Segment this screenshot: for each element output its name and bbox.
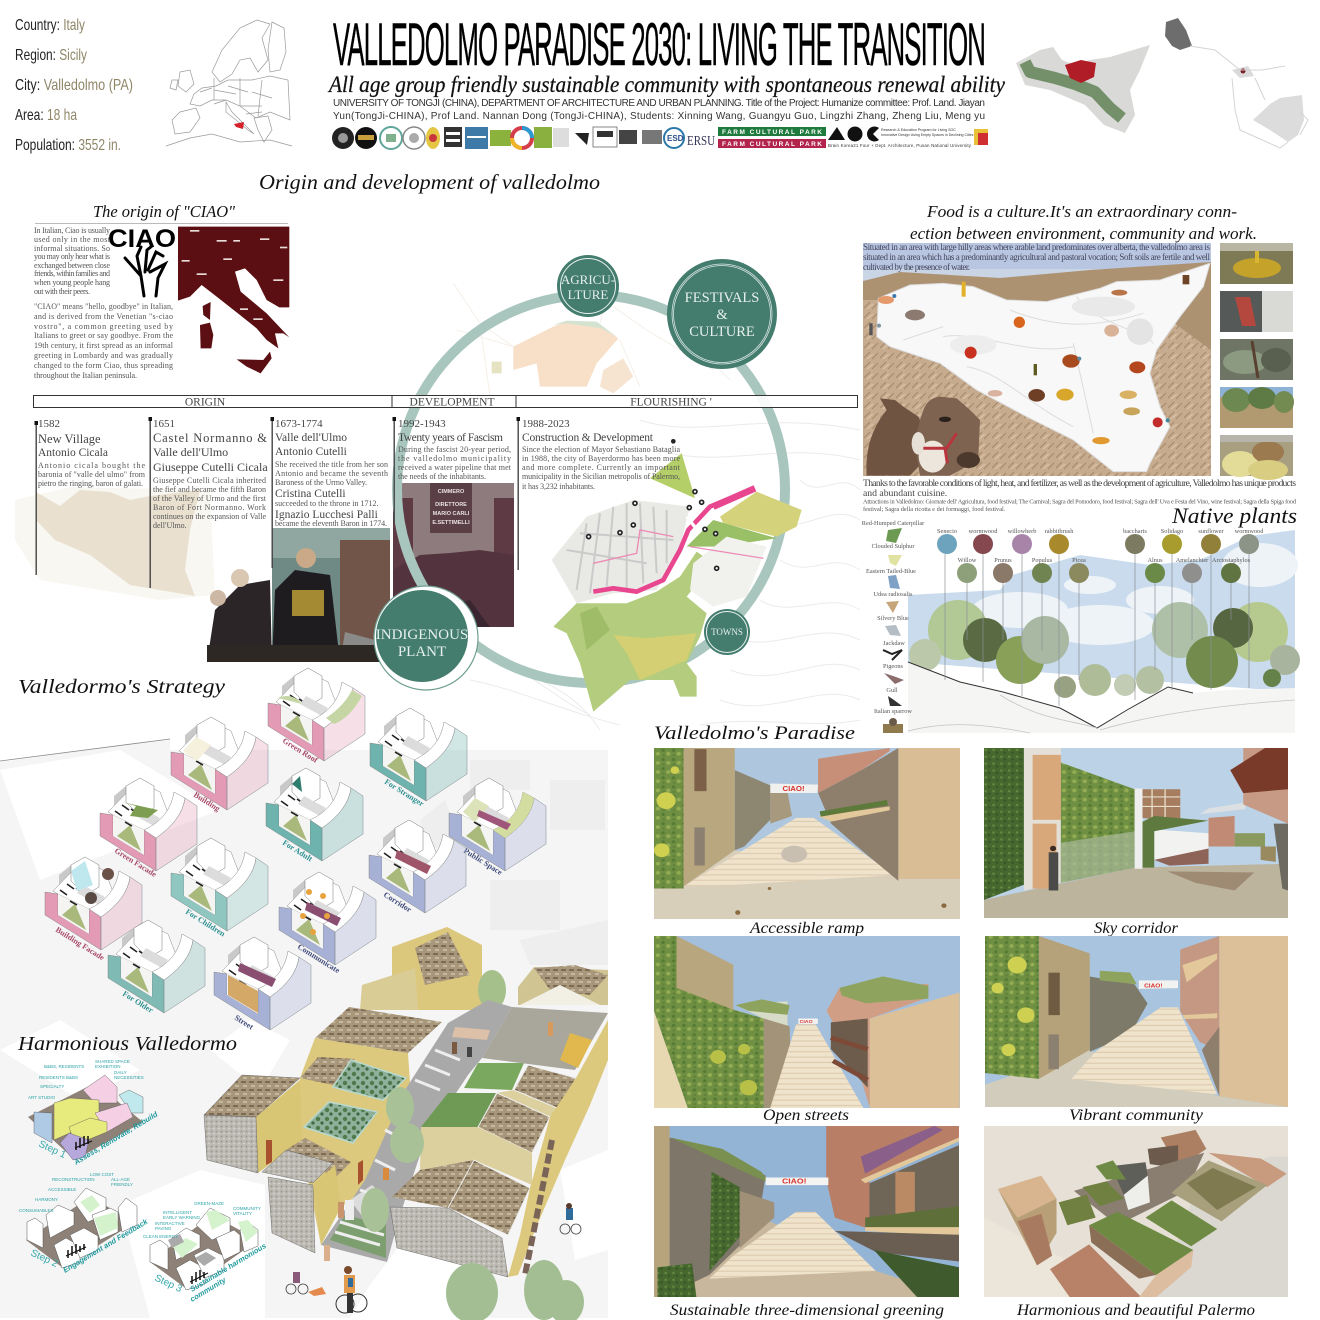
ciao paragraph 1: out with their peers.: [34, 287, 90, 296]
step 1 labels: SHARED SPACE: [95, 1059, 130, 1064]
map: Sicily food locations: [869, 263, 1210, 472]
logo: ciao hand: CIAO: [108, 225, 176, 253]
strategy block: for stranger: [370, 708, 467, 809]
photo: food production: [1220, 291, 1293, 332]
timeline: 1673-1774: became the eleventh Baron in 1774.: [275, 519, 387, 528]
map: Sicily with highlighted province: [1016, 45, 1150, 133]
photo: tree field: [1220, 387, 1294, 428]
text block: agriculture note: Attractions in Valledolmo: Giornate dell' Agricultura, food festival; The Carnival; Sagra del Pomodoro, food festival; Sagra dell' Uva e Festa del Vino, wine festival; Sagra della Spiga food: [863, 498, 1297, 506]
city: City: Valledolmo (PA): [15, 77, 133, 94]
overlay line 1: Situated in an area with large hilly areas where arable land predominates over alberta, the valledolmo area is: [863, 242, 1210, 252]
timeline: 1651: [148, 417, 268, 588]
map: current Valledolmo masterplan: [552, 439, 802, 712]
timeline: 1582: baronia of "valle del ulmo" from: [38, 470, 146, 479]
wildlife names: Pigeons: [883, 663, 904, 670]
render: accessible ramp: CIAO!: [782, 785, 805, 793]
panel: native plants section: [862, 520, 1300, 733]
era: development: DEVELOPMENT: [410, 396, 494, 408]
trees foreground: [446, 1260, 584, 1320]
lower plant names: Populus: [1032, 557, 1053, 564]
step 3 caption line 1: Sustainable harmonious: [188, 1241, 268, 1294]
upper plant names: sunflower: [1198, 528, 1224, 535]
text block: agriculture note: festival; Sagra della ricotta e dei formaggi, food festival.: [863, 506, 1006, 513]
partner logos: Innovative Design Using Empty Spaces in Declining Cities: [881, 133, 974, 137]
chart: transition ring with themes: [374, 255, 802, 712]
block label: Building Facade: [54, 925, 106, 962]
ciao paragraph 1: when young people hang: [34, 278, 110, 287]
timeline: 1992-1943: received a water pipeline that met: [398, 463, 512, 472]
upper plant names: wormwood: [1235, 528, 1264, 535]
step 3 labels: PAVING: [155, 1226, 172, 1231]
step 3 labels: COMMUNITY: [233, 1206, 261, 1211]
partner logos: Brain Korea21 Four + Dept. Architecture, Pusan National University: [828, 143, 972, 148]
strategy block: for adult: [266, 768, 363, 864]
timeline: 1988-2023: in 1988, the city of Bayerdormo has been more: [522, 454, 680, 463]
timeline: 1673-1774: She received the title from her son: [275, 460, 388, 469]
wildlife names: Jackdaw: [883, 640, 905, 647]
overlay line 2: situated in an area which has a predominantly agricultural and pastoral vocation; Soft soils are fertile and well: [863, 252, 1210, 262]
ciao paragraph 2: throughout the Italian peninsula.: [34, 371, 137, 380]
credits line 2: Yun(TongJi-CHINA), Prof Land. Nannan Dong (TongJi-CHINA), Students: Xinning Wang, Guangyu Guo, Lingzhi Zhang, Zheng Liu, Meng yu: [333, 111, 985, 122]
distant houses: [360, 927, 608, 1010]
location facts: [15, 17, 133, 154]
badge: indigenous plant: [374, 586, 478, 690]
ciao paragraph 1: used only in the most: [34, 235, 111, 244]
heading: origin and development: Origin and development of valledolmo: [259, 170, 600, 194]
ciao paragraph 2: greeting in Lombardy and was gradually: [34, 351, 173, 360]
step 3 labels: INTERACTIVE: [155, 1221, 185, 1226]
heading: paradise: Valledolmo's Paradise: [654, 723, 855, 744]
timeline: 1992-1943: 1992-1943: [398, 418, 446, 430]
country: Country: Italy: [15, 17, 85, 34]
step 2 caption: Engagement and Feedback: [61, 1217, 150, 1275]
photo: olive oil: [1220, 243, 1293, 284]
caption: accessible ramp: Accessible ramp: [749, 920, 864, 937]
step 3 labels: CLEAN ENERGY: [143, 1234, 178, 1239]
badge: agriculture: LTURE: [568, 287, 608, 302]
step 2 labels: CONSUMABLES: [19, 1208, 54, 1213]
step 1 labels: DAILY: [114, 1070, 127, 1075]
timeline header bar: [34, 395, 858, 408]
text block: agriculture note: [863, 478, 1297, 513]
hillside section: [908, 662, 1295, 733]
timeline: 1582: pietro the ringing, baron of galati.: [38, 479, 143, 488]
roofs right: [390, 1007, 608, 1277]
heading: native plants: Native plants: [1171, 503, 1297, 528]
plant leader lines: [945, 554, 1249, 706]
heading: strategy: Valledormo's Strategy: [18, 676, 225, 698]
lower plant names: Prunus: [994, 557, 1012, 564]
wildlife column: [862, 520, 925, 733]
timeline: 1673-1774: [270, 417, 388, 568]
badge: festivals and culture: [667, 259, 777, 369]
ciao paragraph 1: In Italian, Ciao is usually: [34, 226, 110, 235]
rule under ciao heading: [35, 223, 288, 224]
step 3 labels: GREEN-MAZE: [194, 1201, 224, 1206]
step 3 caption: [188, 1241, 268, 1304]
image: fascist era photo: [393, 483, 514, 627]
lower plant names: Amelanchier: [1176, 557, 1209, 564]
timeline: 1582: Antonio cicala bought the: [38, 461, 145, 470]
caption: vibrant community: Vibrant community: [1069, 1107, 1203, 1124]
population: Population: 3552 in.: [15, 137, 121, 154]
timeline: 1651: Giuseppe Cutelli Cicala inherited: [153, 476, 266, 485]
timeline: 1673-1774: 1673-1774: [275, 418, 323, 430]
block label: Corridor: [382, 890, 413, 914]
timeline: 1673-1774: Antonio Cutelli: [275, 446, 347, 458]
timeline: 1673-1774: Baroness of the Urmo Valley.: [275, 478, 367, 487]
strategy block: green roof: [268, 668, 365, 765]
wildlife names: Red-Humped Caterpillar: [862, 520, 925, 527]
caption: sustainable greening: Sustainable three-dimensional greening: [670, 1302, 944, 1319]
ciao paragraph 2: and is derived from the Venetian "s-ciao: [34, 312, 173, 321]
ciao paragraph 1: friends, within families and: [34, 269, 110, 278]
upper plant names: rabbitbrush: [1045, 528, 1074, 535]
upper plant names: Solidago: [1161, 528, 1183, 535]
ciao paragraph 2: vostro", a common greeting used by: [34, 322, 173, 331]
timeline: 1992-1943: the needs of the inhabitants.: [398, 472, 486, 481]
credits: [333, 98, 985, 122]
wildlife names: Silvery Blue: [877, 615, 909, 622]
step 2 labels: HARMONY: [35, 1197, 58, 1202]
people and bicycles: [286, 1022, 581, 1313]
photo: cheese pot: [1220, 435, 1293, 480]
strategy block: building: [171, 717, 268, 813]
block label: For Adult: [281, 838, 314, 864]
strategy block: for older: [108, 920, 205, 1015]
overlay line 3: cultivated by the presence of water.: [863, 262, 970, 272]
text block: agriculture note: Thanks to the favorable conditions of light, heat, and fertilizer, as well as the development of agriculture, Valledolmo has unique products: [863, 478, 1296, 489]
text block: ciao explanation: [34, 226, 174, 380]
heading: food is a culture: Food is a culture.It's an extraordinary conn-: [926, 202, 1237, 221]
map: Valledolmo territory: [1165, 18, 1308, 148]
timeline: 1651: the fief and became the fifth Baron: [153, 485, 266, 494]
lower plant names: Picea: [1072, 557, 1086, 564]
heading: origin of ciao: The origin of "CIAO": [93, 202, 236, 221]
timeline: 1988-2023: [516, 417, 681, 570]
trees on street: [361, 1087, 424, 1232]
timeline: 1992-1943: [392, 417, 512, 523]
render: vibrant community: [985, 936, 1288, 1107]
step 2 tag: Step 2: [29, 1248, 60, 1270]
icon: Sicily highlight on Europe map: [234, 122, 244, 129]
diagram: step 2: [19, 1172, 150, 1275]
diagram: step 1: [28, 1059, 160, 1167]
photo sign text: CIMMERO: [438, 489, 465, 495]
timeline: 1673-1774: Ignazio Lucchesi Palli: [275, 509, 378, 521]
step 3 labels: EARLY WARNING: [163, 1215, 201, 1220]
timeline: 1673-1774: succeeded to the throne in 1712.: [275, 499, 379, 508]
photo: olive branches: [1220, 339, 1293, 380]
partner logos: ERSU: [687, 134, 715, 149]
step 1 labels: SPECIALTY: [40, 1084, 64, 1089]
map: Italy dark red: [178, 227, 289, 373]
era: flourishing: FLOURISHING ': [630, 396, 712, 408]
timeline: 1582: New Village: [38, 432, 101, 446]
step 2 labels: LOW COST: [90, 1172, 114, 1177]
timeline: 1988-2023: Since the election of Mayor Sebastiano Bataglia: [522, 445, 680, 454]
timeline: 1651: 1651: [153, 418, 175, 430]
wildlife names: Clouded Sulphur: [872, 543, 915, 550]
strategy block: building facade: [45, 857, 142, 962]
timeline: 1673-1774: Antonio and became the seventh: [275, 469, 388, 478]
timeline: 1992-1943: the valledolmo municipality: [398, 454, 511, 463]
sky: [908, 530, 1295, 692]
step 3 caption line 2: community: [188, 1275, 228, 1304]
strategy block: communicate: [279, 872, 376, 975]
heading: food is a culture: [910, 202, 1257, 243]
map: Europe outline: [166, 20, 292, 146]
step 2 labels: FRIENDLY: [111, 1182, 133, 1187]
strategy block: corridor: [369, 820, 466, 914]
ciao paragraph 2: 19th century, it first spread as an informal: [34, 341, 174, 350]
plant circles row two: [957, 563, 1241, 583]
timeline: 1651: Valle dell'Ulmo: [153, 445, 228, 459]
step 1 caption: Assess, Renovate, Rebuild: [72, 1109, 160, 1167]
timeline: 1988-2023: municipality in the Sicilian metropolis of Palermo,: [522, 472, 680, 481]
caption: sky corridor: Sky corridor: [1094, 920, 1179, 937]
step 1 labels: NECESSITIES: [114, 1075, 144, 1080]
badge: indigenous plant: INDIGENOUS: [376, 627, 468, 643]
upper plant names: wormwood: [969, 528, 998, 535]
partner logos: FARM CULTURAL PARK: [722, 129, 822, 136]
main isometric building: [204, 927, 608, 1320]
ring: [397, 295, 785, 683]
strategy block: public space: [449, 778, 546, 877]
panel: strategy and harmonious ground: [0, 739, 608, 1318]
timeline: 1673-1774: Valle dell'Ulmo: [275, 432, 347, 444]
step 1 labels: EXHIBITION: [95, 1064, 121, 1069]
wildlife names: Eastern Tailed-Blue: [866, 568, 916, 575]
ciao paragraph 1: exchanged between close: [34, 261, 110, 270]
ciao paragraph 1: you may only hear what is: [34, 252, 110, 261]
block label: Public Space: [462, 846, 504, 877]
step 1 labels: B&BS, RESIDENTS: [44, 1064, 84, 1069]
partner logos: [332, 126, 988, 149]
lower plant names: [958, 557, 1251, 564]
upper plant names: [937, 528, 1264, 535]
block label: Street: [233, 1013, 255, 1032]
timeline: 1988-2023: and more complete. Currently an important: [522, 463, 681, 472]
render: sustainable greening: CIAO!: [782, 1177, 807, 1186]
map: old Sicily map: [15, 487, 215, 600]
step 1 labels: ART STUDIO: [28, 1095, 56, 1100]
block label: Communicate: [296, 942, 342, 975]
badge: towns: TOWNS: [711, 627, 743, 637]
credits line 1: UNIVERSITY OF TONGJI (CHINA), DEPARTMENT OF ARCHITECTURE AND URBAN PLANNING. Title of the Project: Humanize committee: Prof. Land. Jiayan: [333, 98, 985, 109]
upper plant names: Senecio: [937, 528, 957, 535]
timeline: 1673-1774: Cristina Cutelli: [275, 488, 346, 500]
area: Area: 18 ha: [15, 107, 77, 124]
render: open streets: [654, 936, 960, 1108]
step 3 labels: VITALITY: [233, 1211, 252, 1216]
ciao paragraph 2: changed to the form Ciao, thus spreading: [34, 361, 173, 370]
map: historic town and road network: [453, 273, 730, 397]
timeline: 1988-2023: Construction & Development: [522, 432, 654, 444]
street and stairs: [321, 1000, 512, 1262]
ciao paragraph 2: "CIAO" means "hello, goodbye" in Italian,: [34, 302, 173, 311]
timeline: 1651: Castel Normanno &: [153, 431, 267, 445]
render: aerial view: [984, 1126, 1288, 1297]
icons: regional foods: [869, 275, 1189, 444]
render: accessible ramp: [654, 748, 960, 919]
step 2 labels: ALL-AGE: [111, 1177, 130, 1182]
badge: agriculture: AGRICU-: [561, 272, 615, 287]
trees: [909, 600, 1300, 698]
caption: aerial view: Harmonious and beautiful Palermo: [1016, 1302, 1255, 1319]
block label: For Older: [121, 989, 155, 1015]
partner logos: ESD: [667, 134, 684, 143]
block label: For Stranger: [383, 777, 426, 809]
render: vibrant community: CIAO!: [1144, 983, 1163, 989]
block label: For Children: [184, 907, 227, 939]
image: fascist era photo: DIRETTORE: [435, 502, 467, 508]
block label: Building: [192, 790, 222, 813]
step 3 labels: [143, 1201, 261, 1239]
strategy block: for children: [171, 838, 268, 939]
timeline: 1651: Giuseppe Cutelli Cicala: [153, 460, 268, 474]
timeline: 1651: of the Valley of Urmo and the first: [153, 494, 267, 503]
caption: open streets: Open streets: [763, 1107, 849, 1124]
image: fascist era photo: MARIO CARLI: [433, 511, 470, 517]
diagram: step 3: [143, 1201, 268, 1304]
text block: agriculture note: and abundant cuisine.: [863, 488, 947, 499]
upper plant names: baccharis: [1123, 528, 1147, 535]
lower plant names: Alnus: [1147, 557, 1163, 564]
wildlife names: Italian sparrow: [874, 708, 912, 715]
region: Region: Sicily: [15, 47, 87, 64]
timeline: 1651: dell'Ulmo.: [153, 521, 187, 530]
logo: ciao hand: [108, 225, 176, 296]
ciao paragraph 1: [34, 226, 111, 296]
step 2 labels: [19, 1172, 133, 1213]
timeline: 1988-2023: 1988-2023: [522, 418, 570, 430]
era: origin: ORIGIN: [185, 396, 226, 408]
partner logos: Research & Education Program for Living SOC: [881, 128, 956, 132]
timeline: 1992-1943: During the fascist 20-year period,: [398, 445, 511, 454]
block label: Green Facade: [113, 846, 158, 879]
strategy block: green facade: [100, 778, 197, 879]
plant circles row one: [937, 534, 1259, 554]
timeline: 1582: 1582: [38, 418, 60, 430]
step 1 labels: RESIDENTS B&BS: [39, 1075, 78, 1080]
heading: harmonious: Harmonious Valledormo: [17, 1033, 237, 1055]
badge: agriculture: [557, 255, 619, 317]
lower plant names: Arctostaphylos: [1212, 557, 1251, 564]
step 1 tag: Step 1: [37, 1139, 68, 1161]
step 3 labels: INTELLIGENT: [163, 1210, 192, 1215]
step 3 tag: Step 3: [153, 1273, 184, 1295]
timeline: 1651: Baron of Fort Normanno. Work: [153, 503, 266, 512]
yellow walls behind roofs: [300, 1038, 412, 1245]
timeline: 1582: Antonio Cicala: [38, 447, 108, 459]
lower plant names: Willow: [958, 557, 977, 564]
badge: festivals and culture: CULTURE: [689, 324, 755, 340]
badge: indigenous plant: PLANT: [398, 644, 446, 660]
timeline: 1992-1943: Twenty years of Fascism: [398, 432, 503, 444]
ciao paragraph 2: [34, 302, 174, 380]
render: sky corridor: [984, 748, 1288, 918]
ciao paragraph 1: informal situations. So: [34, 244, 110, 253]
wildlife names: Udea radiosalis: [874, 591, 913, 598]
step 2 labels: ACCESSIBLE: [48, 1187, 76, 1192]
heading: food is a culture: ection between environment, community and work.: [910, 224, 1257, 243]
plant names: [937, 528, 1264, 564]
strategy block: street: [214, 937, 311, 1032]
image: donkeys: [866, 397, 980, 476]
image: fascist era photo: E.SETTIMELLI: [432, 520, 470, 526]
step 1 labels: [28, 1059, 144, 1100]
partner logos: FARM CULTURAL PARK: [722, 141, 822, 148]
badge: festivals and culture: &: [716, 307, 728, 323]
render: open streets: CIAO: [800, 1019, 813, 1025]
panel: food map of Sicily: [863, 242, 1211, 476]
subtitle: All age group friendly sustainable community with spontaneous renewal ability: [327, 72, 1006, 97]
timeline: 1988-2023: it has 3,232 inhabitants.: [522, 482, 595, 491]
timeline: 1582: [34, 418, 146, 575]
timeline: 1651: continues on the expansion of Valle: [153, 512, 266, 521]
wildlife names: Gull: [886, 687, 898, 694]
upper plant names: willowherb: [1008, 528, 1036, 535]
badge: festivals and culture: FESTIVALS: [685, 290, 759, 306]
block label: Green Roof: [281, 736, 320, 765]
food text overlay: [863, 242, 1210, 272]
wildlife names: [862, 520, 925, 715]
image: Baron painting: [207, 528, 390, 662]
background: contour lines: [470, 420, 860, 730]
step 2 labels: RECONSTRUCTION: [52, 1177, 94, 1182]
badge: towns: [704, 609, 750, 655]
roof and wall stacks left: [204, 1007, 442, 1253]
render: sustainable greening: [654, 1126, 959, 1297]
ciao paragraph 2: Italians to greet or say goodbye. From the: [34, 331, 173, 340]
